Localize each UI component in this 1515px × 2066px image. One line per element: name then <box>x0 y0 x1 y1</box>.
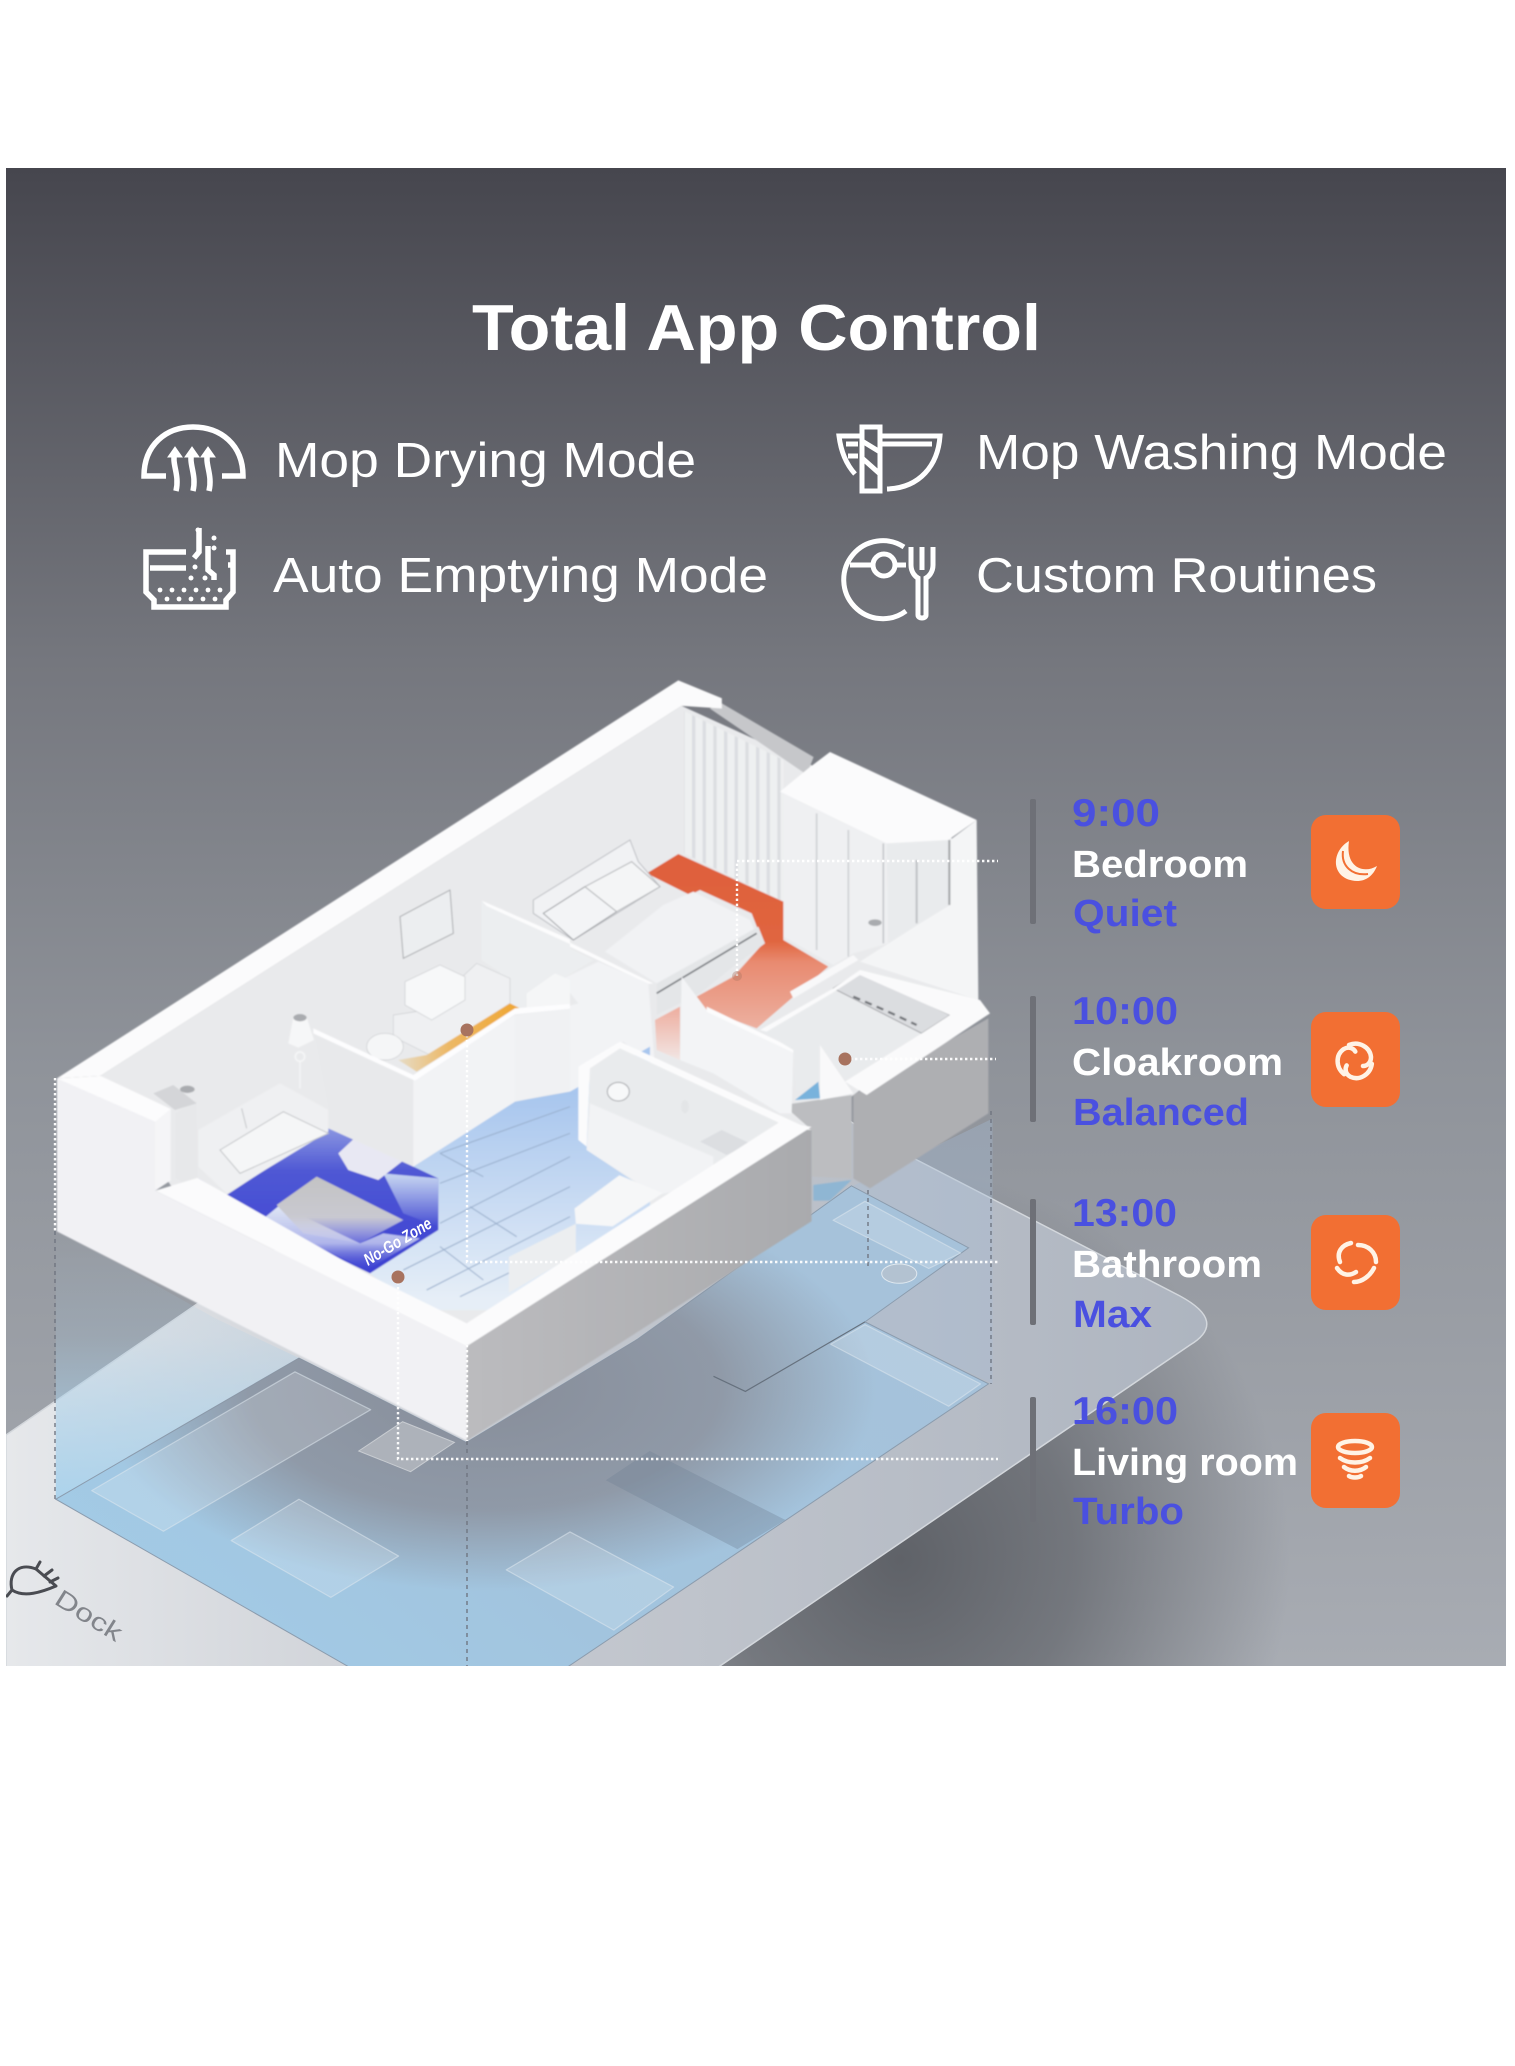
icon: moon <box>1311 815 1400 909</box>
icon: balanced swirl <box>1311 1012 1400 1107</box>
schedule: 16:00 living room <box>1030 1390 1400 1533</box>
bedroom red floor <box>647 854 828 1028</box>
projected floor map <box>56 1119 993 1668</box>
feature: mop drying mode <box>144 427 696 491</box>
schedule: 10:00 cloakroom: Cloakroom <box>1072 1042 1283 1084</box>
feature: auto emptying mode <box>146 528 768 607</box>
schedule: 10:00 cloakroom: 10:00 <box>1072 990 1178 1033</box>
living room and bathroom <box>153 890 650 1310</box>
icon: dust bin <box>146 528 233 607</box>
feature: custom routines <box>844 541 1377 619</box>
feature: mop drying mode: Mop Drying Mode <box>275 434 696 488</box>
icon: plate and fork <box>844 541 933 619</box>
icon: turbo tornado <box>1311 1413 1400 1508</box>
no-go zone label: No-Go Zone <box>360 1214 435 1269</box>
front wall rims <box>57 1076 812 1346</box>
dock label: Dock <box>50 1584 128 1648</box>
schedule: 10:00 cloakroom: Balanced <box>1073 1092 1249 1134</box>
feature: auto emptying mode: Auto Emptying Mode <box>273 549 768 603</box>
room marker dots <box>392 971 852 1284</box>
projection dashed guides <box>55 1111 991 1666</box>
feature: custom routines: Custom Routines <box>976 549 1377 603</box>
bathroom fixtures <box>367 890 570 1060</box>
schedule: 9:00 bedroom <box>1030 792 1400 935</box>
icon: max swirl <box>1311 1215 1400 1310</box>
feature: mop washing mode <box>839 426 1447 491</box>
schedule: 9:00 bedroom: Quiet <box>1073 893 1177 935</box>
wardrobe and right wall <box>780 752 978 1000</box>
floor planks <box>403 1107 570 1297</box>
schedule: 9:00 bedroom: Bedroom <box>1072 844 1248 886</box>
schedule: 13:00 bathroom: 13:00 <box>1072 1192 1177 1235</box>
bed <box>533 840 765 1015</box>
sofa <box>220 1109 330 1174</box>
no-go zone <box>226 1128 440 1274</box>
lamp <box>289 1014 314 1062</box>
bathroom yellow floor <box>398 1003 527 1072</box>
bedroom partition wall <box>568 943 794 1113</box>
curtain drape and wall end <box>154 1085 196 1110</box>
schedule: 16:00 living room: 16:00 <box>1072 1390 1178 1433</box>
bathroom front walls and door <box>313 1004 570 1167</box>
closet outer faces <box>783 1018 988 1201</box>
schedule: 13:00 bathroom: Max <box>1073 1294 1152 1336</box>
schedule: 10:00 cloakroom <box>1030 990 1400 1134</box>
icon: mop and bowl <box>839 427 940 491</box>
plate shadow <box>722 1352 1254 1666</box>
icon: dock plug <box>7 1562 58 1596</box>
blue living room floor <box>370 1047 650 1310</box>
schedule: 13:00 bathroom: Bathroom <box>1072 1244 1262 1286</box>
curtain <box>692 716 780 900</box>
cloakroom interior <box>760 955 990 1100</box>
white dotted callout lines <box>55 861 998 1459</box>
panel: app control background <box>6 168 1506 1666</box>
schedule: 9:00 bedroom: 9:00 <box>1072 792 1160 835</box>
shell: outer walls and back wall <box>57 680 976 1441</box>
schedule: 16:00 living room: Living room <box>1072 1442 1298 1484</box>
coffee table <box>277 1177 403 1243</box>
washing machine and bench <box>57 1076 812 1346</box>
isometric apartment model <box>57 680 990 1441</box>
pink hallway floor <box>655 1007 680 1060</box>
title: Total App Control <box>472 291 1041 364</box>
feature: mop washing mode: Mop Washing Mode <box>976 426 1447 480</box>
schedule: 13:00 bathroom <box>1030 1192 1400 1336</box>
ottoman <box>338 1139 402 1181</box>
kitchen <box>578 1042 812 1197</box>
schedule: 16:00 living room: Turbo <box>1073 1491 1184 1533</box>
bedroom and cloakroom <box>500 711 990 1201</box>
floor plan plate <box>6 1121 1208 1666</box>
icon: heat dome <box>144 427 243 491</box>
